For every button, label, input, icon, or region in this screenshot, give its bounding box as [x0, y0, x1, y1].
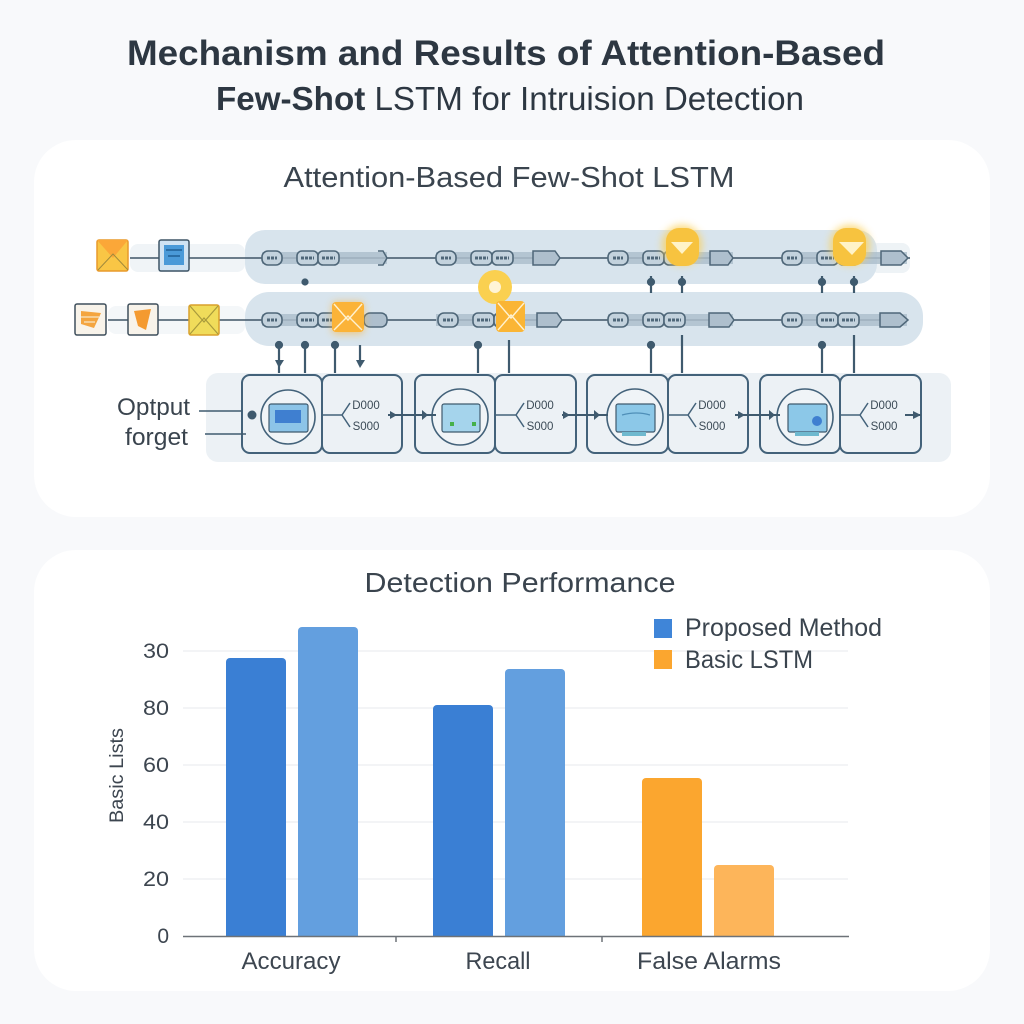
panel: detection performance — [34, 550, 990, 991]
LSTM cell 4: D000 — [870, 400, 898, 412]
LSTM cell 2: D000 — [526, 400, 554, 412]
y axis labels: 30 — [143, 640, 169, 663]
attention highlight: glowing dot — [478, 270, 512, 304]
attention highlight: lower row 2 — [496, 301, 525, 332]
diagram heading: Attention-Based Few-Shot LSTM — [284, 162, 734, 194]
panel: mechanism diagram — [34, 140, 990, 517]
band: upper sequence row — [130, 230, 910, 284]
LSTM cell 4 — [760, 375, 921, 453]
side labels: Optput and forget — [117, 394, 246, 451]
x axis — [183, 936, 849, 942]
title: Mechanism and Results of Attention-Based — [127, 34, 885, 73]
icon: input tile 2, lower row — [128, 304, 158, 335]
bars: Accuracy — [226, 627, 358, 936]
icon: input mail, upper row — [97, 240, 128, 271]
y axis labels: 20 — [143, 868, 169, 891]
x axis labels: Accuracy — [242, 948, 340, 975]
y axis labels: 40 — [143, 811, 169, 834]
legend: Proposed Method — [685, 614, 882, 642]
LSTM cell 1: D000 — [352, 400, 380, 412]
title — [127, 34, 885, 117]
attention highlight: upper row 2 — [830, 225, 870, 266]
icon: input mail, lower row — [189, 305, 219, 335]
icon: input tile 1, lower row — [75, 304, 106, 335]
connectors between rows and cells — [275, 276, 857, 375]
cell chain connectors — [248, 410, 921, 420]
band: LSTM cell row — [206, 373, 951, 462]
x axis labels: Recall — [466, 948, 530, 975]
LSTM cell 2: S000 — [527, 421, 553, 433]
LSTM cell 3 — [587, 375, 748, 453]
chart heading: Detection Performance — [364, 567, 676, 598]
band: lower sequence row — [108, 292, 923, 346]
LSTM cell 3: S000 — [699, 421, 725, 433]
title: Few-Shot LSTM for Intruision Detection — [216, 80, 804, 117]
LSTM cell 3: D000 — [698, 400, 726, 412]
bars: False Alarms — [642, 778, 774, 936]
LSTM cell 1 — [242, 375, 402, 453]
side labels: Optput and forget: forget — [125, 424, 188, 451]
y axis title: Basic Lists — [107, 728, 128, 823]
side labels: Optput and forget: Optput — [117, 394, 190, 421]
y axis labels: 0 — [157, 925, 169, 948]
legend — [654, 614, 882, 674]
legend: Basic LSTM — [685, 646, 813, 674]
y axis labels — [143, 640, 169, 948]
x axis labels — [242, 948, 781, 975]
LSTM cell 2 — [415, 375, 576, 453]
y axis labels: 80 — [143, 697, 169, 720]
attention highlight: lower row 1 — [332, 302, 364, 334]
LSTM cell 1: S000 — [353, 421, 379, 433]
LSTM cell 4: S000 — [871, 421, 897, 433]
icon: input document, upper row — [159, 240, 189, 271]
x axis labels: False Alarms — [637, 948, 781, 975]
bar chart — [107, 627, 849, 975]
y axis labels: 60 — [143, 754, 169, 777]
attention highlight: upper row 1 — [662, 225, 702, 266]
bars: Recall — [433, 669, 565, 936]
